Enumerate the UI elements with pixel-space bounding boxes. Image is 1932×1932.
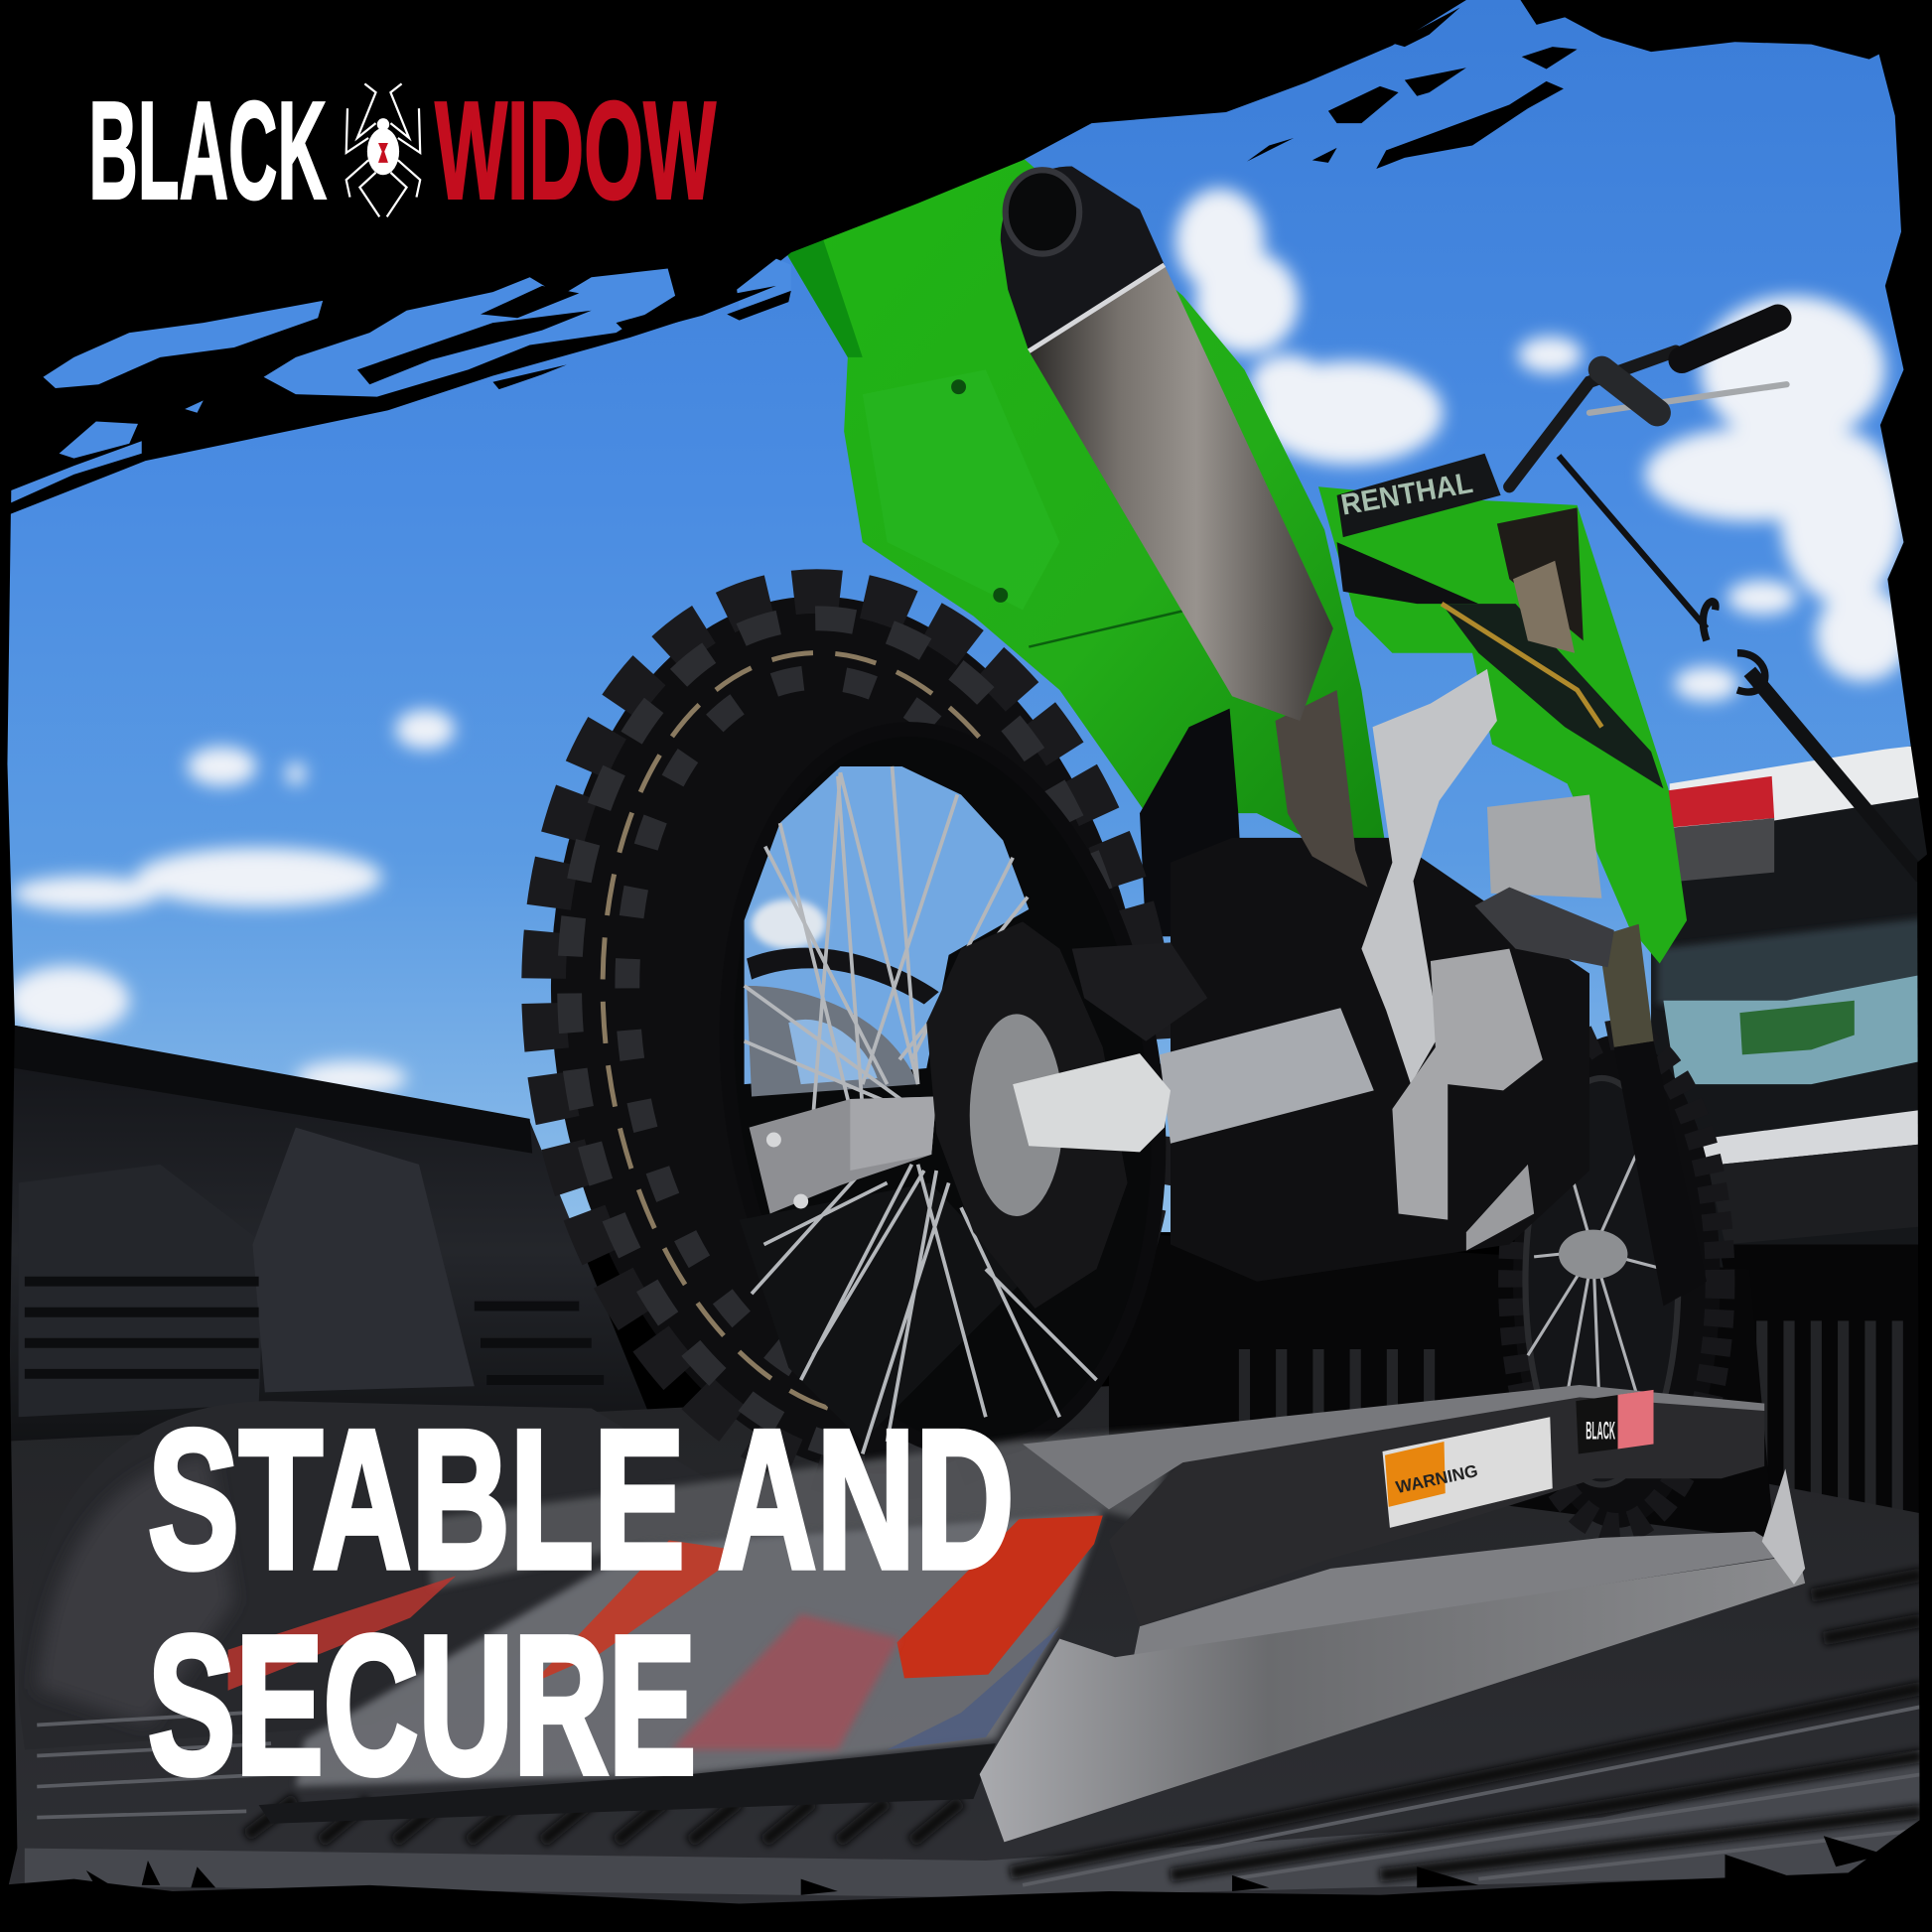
brake disc: [926, 921, 1128, 1309]
sky background: [0, 0, 1932, 1232]
front wheel: [1513, 1035, 1721, 1528]
green bodywork: [1318, 454, 1687, 964]
black brush streaks over the sky: [1247, 0, 1932, 169]
logo: BLACK: [88, 72, 327, 228]
black streaks inside the blue brush marks: [357, 286, 791, 389]
loading ramp: [228, 1385, 1805, 1842]
front fork: [1475, 888, 1707, 1307]
handlebar pad text: RENTHAL: [1338, 467, 1475, 522]
radiator: [1487, 794, 1601, 898]
rear rim and spokes: [682, 701, 1203, 1480]
grunge specks at the bottom edge: [86, 1836, 1885, 1895]
swingarm: [1160, 1008, 1374, 1144]
blue streaks in brush stroke: [11, 259, 791, 502]
truck cab behind the bike: [1651, 740, 1932, 1540]
engine and dark mechanical area: [1171, 838, 1589, 1282]
headline: [148, 1390, 1014, 1816]
clouds: [6, 189, 1910, 1095]
headline: SECURE: [148, 1595, 696, 1816]
axle block: [1013, 1053, 1171, 1152]
tire tread detail: [517, 582, 1183, 1488]
outer tire knobs: [487, 551, 1212, 1519]
ramp logo sticker: BLACK: [1586, 1419, 1615, 1446]
headline: STABLE AND: [148, 1390, 1014, 1610]
rear wheel tire: [487, 551, 1212, 1519]
truck bed side wall: [0, 1023, 665, 1478]
handlebar: [1509, 318, 1787, 486]
truck bed floor and wheel well: [0, 1232, 1932, 1932]
rear fender: [778, 158, 1386, 863]
tie-down strap: [1559, 456, 1922, 878]
warning label: WARNING: [1394, 1460, 1479, 1497]
warning label: [1382, 1417, 1553, 1528]
ramp logo sticker: [1576, 1390, 1654, 1453]
exhaust pipe lower section: [1276, 690, 1368, 888]
aluminum frame: [1361, 669, 1543, 1251]
fender shading: [778, 228, 1244, 936]
icon: spider: [346, 83, 420, 216]
logo wordmark: Widow: WIDOW: [435, 72, 716, 228]
black brush stroke header: [0, 0, 1466, 517]
exhaust muffler: [1001, 167, 1333, 721]
brake caliper: [1072, 942, 1207, 1041]
